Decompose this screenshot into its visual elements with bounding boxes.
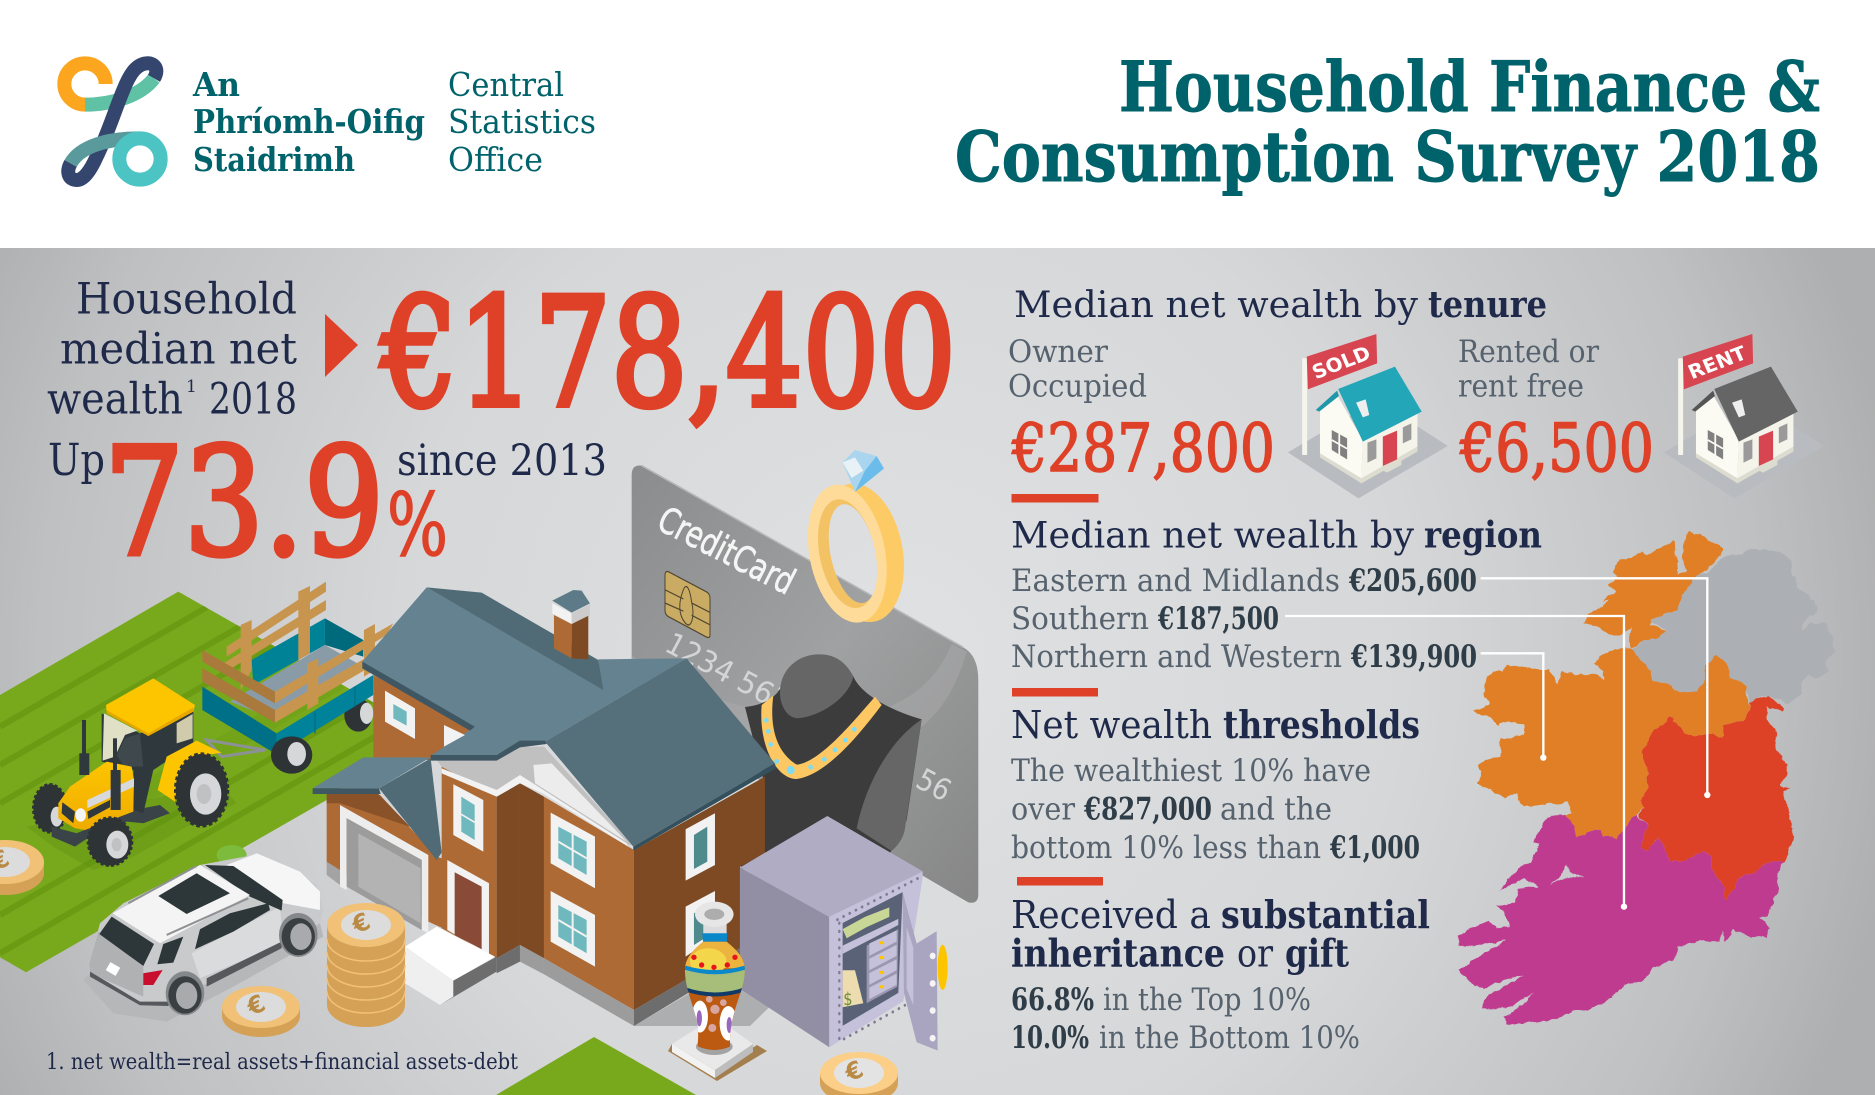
icon: car	[83, 845, 323, 1022]
card number: 1234 567	[659, 626, 796, 721]
tenure: rented or rent free: €6,500	[1459, 410, 1654, 487]
icon: coin stack: €	[347, 907, 375, 940]
leader line: Southern	[1285, 616, 1626, 909]
region values: Eastern and Midlands	[1011, 563, 1340, 599]
title	[955, 47, 1820, 198]
inheritance figures: 10.0%	[1011, 1020, 1089, 1056]
logo text: Irish name: Phríomh-Oifig	[193, 102, 425, 141]
red divider	[1017, 877, 1103, 886]
arrow	[325, 314, 358, 377]
headline label: household median net wealth: median net	[60, 324, 297, 374]
icon: coin stack	[327, 903, 405, 1027]
tenure: rented or rent free: rent free	[1458, 368, 1584, 404]
growth: up 73.9% since 2013	[48, 417, 607, 590]
headline label: household median net wealth	[47, 274, 297, 424]
tenure: owner occupied: Owner	[1008, 334, 1108, 370]
logo text: English name: Office	[448, 140, 543, 179]
green field behind tractor	[0, 592, 375, 972]
heading: inheritance or gift: Received a	[1011, 893, 1211, 937]
green field lower	[496, 1037, 696, 1095]
logo text: Irish name	[192, 65, 425, 179]
thresholds body: over	[1011, 792, 1075, 828]
icon: house	[313, 587, 776, 1026]
logo: CSO knot mark	[64, 63, 161, 180]
heading: inheritance or gift: gift	[1285, 930, 1349, 976]
heading: inheritance or gift	[1011, 892, 1430, 976]
region values: €205,600	[1348, 563, 1477, 599]
icon: coin left	[0, 840, 44, 895]
growth: up 73.9% since 2013: 73.9	[104, 417, 384, 590]
region values: €187,500	[1157, 601, 1279, 637]
thresholds body: €1,000	[1329, 830, 1420, 866]
logo text: Irish name: Staidrimh	[193, 140, 355, 179]
icon: vase on plinth	[668, 902, 767, 1081]
leader line: Northern and Western	[1481, 653, 1545, 760]
icon: sold house: SOLD	[1308, 341, 1374, 384]
logo text: English name: Central	[448, 65, 564, 104]
icon: coin by safe: €	[840, 1055, 868, 1088]
inheritance figures: 66.8%	[1011, 982, 1094, 1018]
icon: safe	[740, 816, 948, 1050]
heading: net wealth thresholds: thresholds	[1223, 702, 1420, 747]
heading: inheritance or gift: substantial	[1221, 892, 1430, 937]
growth: up 73.9% since 2013: since 2013	[397, 436, 607, 486]
logo text: Irish name: An	[192, 65, 240, 104]
red divider	[1012, 494, 1098, 502]
region values: Northern and Western	[1011, 639, 1342, 675]
map of Ireland by region	[1285, 530, 1835, 1025]
headline label: household median net wealth: 2018	[209, 374, 297, 424]
headline label: household median net wealth: Household	[76, 274, 297, 324]
headline label: household median net wealth: wealth	[47, 374, 183, 424]
logo text: English name: Statistics	[448, 102, 596, 141]
thresholds body: bottom 10% less than	[1011, 830, 1321, 866]
heading: net wealth by tenure: tenure	[1428, 284, 1547, 326]
thresholds body: and the	[1220, 792, 1332, 828]
tenure: owner occupied	[1008, 334, 1275, 487]
tenure: owner occupied: Occupied	[1008, 368, 1147, 404]
leader line: Eastern and Midlands	[1481, 578, 1709, 797]
heading: net wealth thresholds	[1011, 702, 1420, 747]
region values: €139,900	[1350, 639, 1477, 675]
icon: safe: $	[843, 989, 853, 1010]
red divider	[1012, 688, 1098, 696]
thresholds body: €827,000	[1083, 792, 1212, 828]
heading: net wealth by region: region	[1424, 514, 1542, 556]
icon: rent house: RENT	[1684, 341, 1750, 384]
thresholds body: The wealthiest 10% have	[1011, 753, 1371, 789]
heading: inheritance or gift: inheritance	[1011, 930, 1225, 976]
growth: up 73.9% since 2013: %	[387, 476, 448, 576]
card number	[659, 626, 957, 809]
tenure: rented or rent free	[1458, 334, 1654, 487]
icon: diamond ring	[808, 450, 904, 623]
region values	[1011, 563, 1477, 675]
heading: inheritance or gift: or	[1237, 932, 1274, 976]
card chip	[665, 571, 710, 637]
map regions	[1458, 530, 1835, 1025]
icon: sold house	[1288, 334, 1448, 498]
footnote: 1. net wealth=real assets+financial assets-debt	[46, 1050, 518, 1075]
icon: coin by safe	[820, 1052, 898, 1095]
inheritance figures: in the Bottom 10%	[1099, 1020, 1360, 1056]
card text: CreditCard: CreditCard	[651, 499, 801, 603]
heading: net wealth by region: Median net wealth by	[1011, 516, 1415, 556]
icon: coin front	[222, 986, 300, 1037]
growth: up 73.9% since 2013: Up	[48, 435, 105, 486]
credit card	[632, 465, 978, 903]
icon: rent house	[1664, 334, 1824, 498]
inheritance figures: in the Top 10%	[1103, 982, 1311, 1018]
tenure: rented or rent free: Rented or	[1458, 334, 1599, 370]
heading: net wealth thresholds: Net wealth	[1011, 703, 1212, 747]
card number: 56	[910, 762, 957, 809]
thresholds body	[1011, 753, 1420, 866]
icon: trailer	[202, 582, 393, 774]
headline label: household median net wealth: 1	[186, 377, 197, 397]
tenure: owner occupied: €287,800	[1011, 410, 1275, 487]
header band	[0, 0, 1875, 248]
icon: coin front: €	[242, 989, 270, 1022]
headline value: €178,400	[380, 267, 956, 441]
icon: jewellery bust and necklace	[740, 654, 922, 870]
region values: Southern	[1011, 601, 1149, 637]
background panel	[0, 248, 1875, 1095]
inheritance figures	[1011, 982, 1360, 1056]
heading: net wealth by tenure: Median net wealth by	[1014, 285, 1419, 326]
icon: tractor	[33, 678, 228, 866]
logo text: English name	[448, 65, 596, 179]
